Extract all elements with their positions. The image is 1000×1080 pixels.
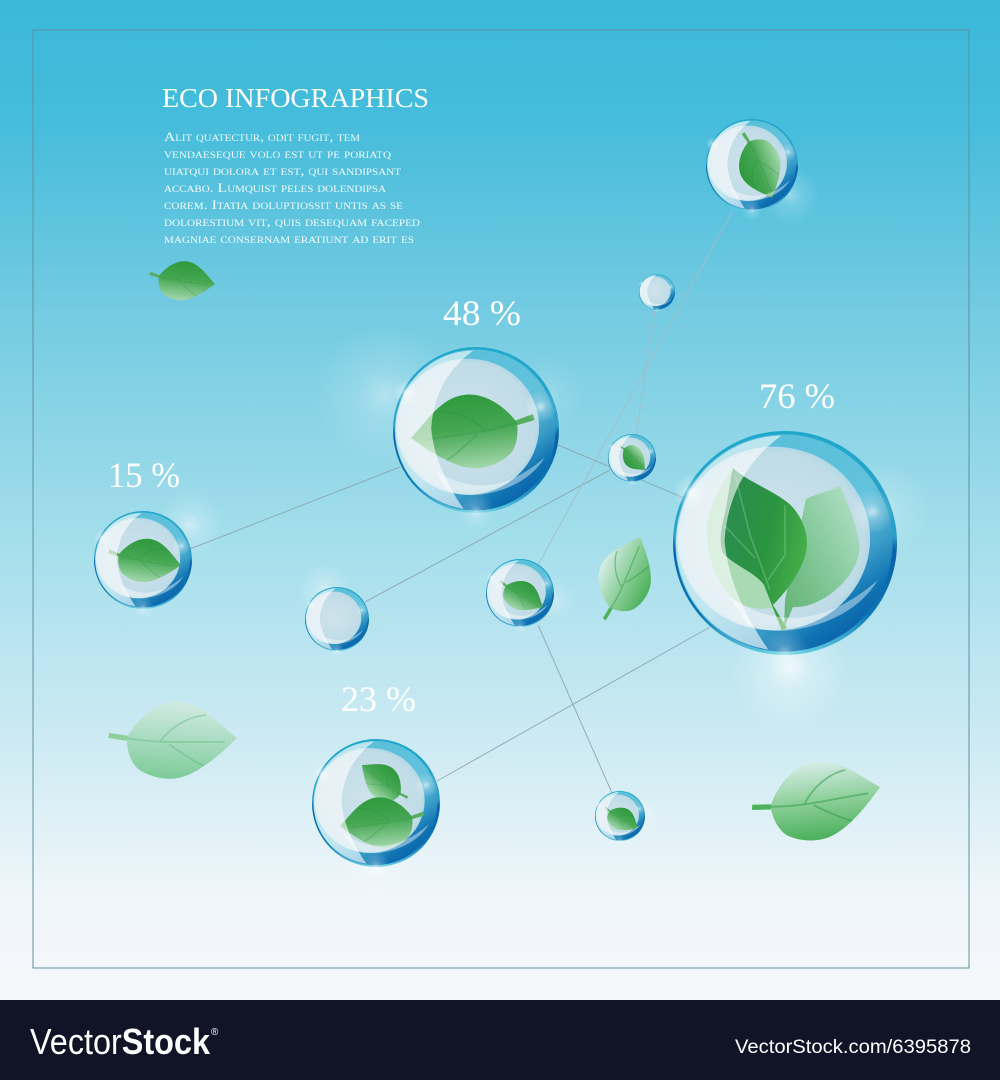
bubble: small clear top xyxy=(639,274,675,314)
text block: uiatqui dolora et est, qui sandipsant xyxy=(164,163,402,178)
dark centre leaf xyxy=(721,468,807,631)
text block: dolorestium vit, quis desequam faceped xyxy=(164,214,421,229)
bubble: 48 percent xyxy=(393,347,559,530)
label: 15 percent: 15 % xyxy=(108,455,180,495)
bubble: 15 percent xyxy=(94,511,192,619)
text block: Alit quatectur, odit fugit, tem xyxy=(164,129,360,144)
bubble: small leaf centre xyxy=(608,434,656,487)
bubble: 23 percent xyxy=(312,739,440,880)
title: ECO INFOGRAPHICS xyxy=(162,83,429,113)
label: 23 percent: 23 % xyxy=(341,679,416,719)
bubble: centre small leaf xyxy=(486,559,554,634)
footer bar xyxy=(0,1000,1000,1080)
bubble: 76 percent xyxy=(673,431,897,677)
text block: vendaeseque volo est ut pe poriatq xyxy=(164,146,392,161)
label: 76 percent: 76 % xyxy=(759,376,835,416)
leaf veins xyxy=(724,475,785,590)
label: 48 percent: 48 % xyxy=(443,293,521,333)
bubble: clear lower xyxy=(305,587,369,657)
text block: magniae consernam eratiunt ad erit es xyxy=(164,231,414,246)
loose leaf: lower right xyxy=(746,751,887,851)
loose leaf: top left xyxy=(147,257,218,305)
background glows xyxy=(156,165,930,901)
pale left leaf xyxy=(707,468,783,628)
loose leaf: pale left xyxy=(108,702,237,779)
registered mark: ® xyxy=(211,1027,219,1038)
connector lines xyxy=(190,212,732,793)
loose leaf: centre xyxy=(583,527,666,631)
bubble: top leaf xyxy=(706,119,798,220)
text block xyxy=(164,129,421,246)
text block: accabo. Lumquist peles dolendipsa xyxy=(164,180,387,195)
text block: corem. Itatia doluptiossit untis as se xyxy=(164,197,404,212)
pale right leaf xyxy=(784,486,859,628)
bubble: bottom small leaf xyxy=(595,791,645,846)
footer logo: VectorStock xyxy=(30,1021,211,1062)
footer url: VectorStock.com/6395878 xyxy=(735,1037,971,1058)
